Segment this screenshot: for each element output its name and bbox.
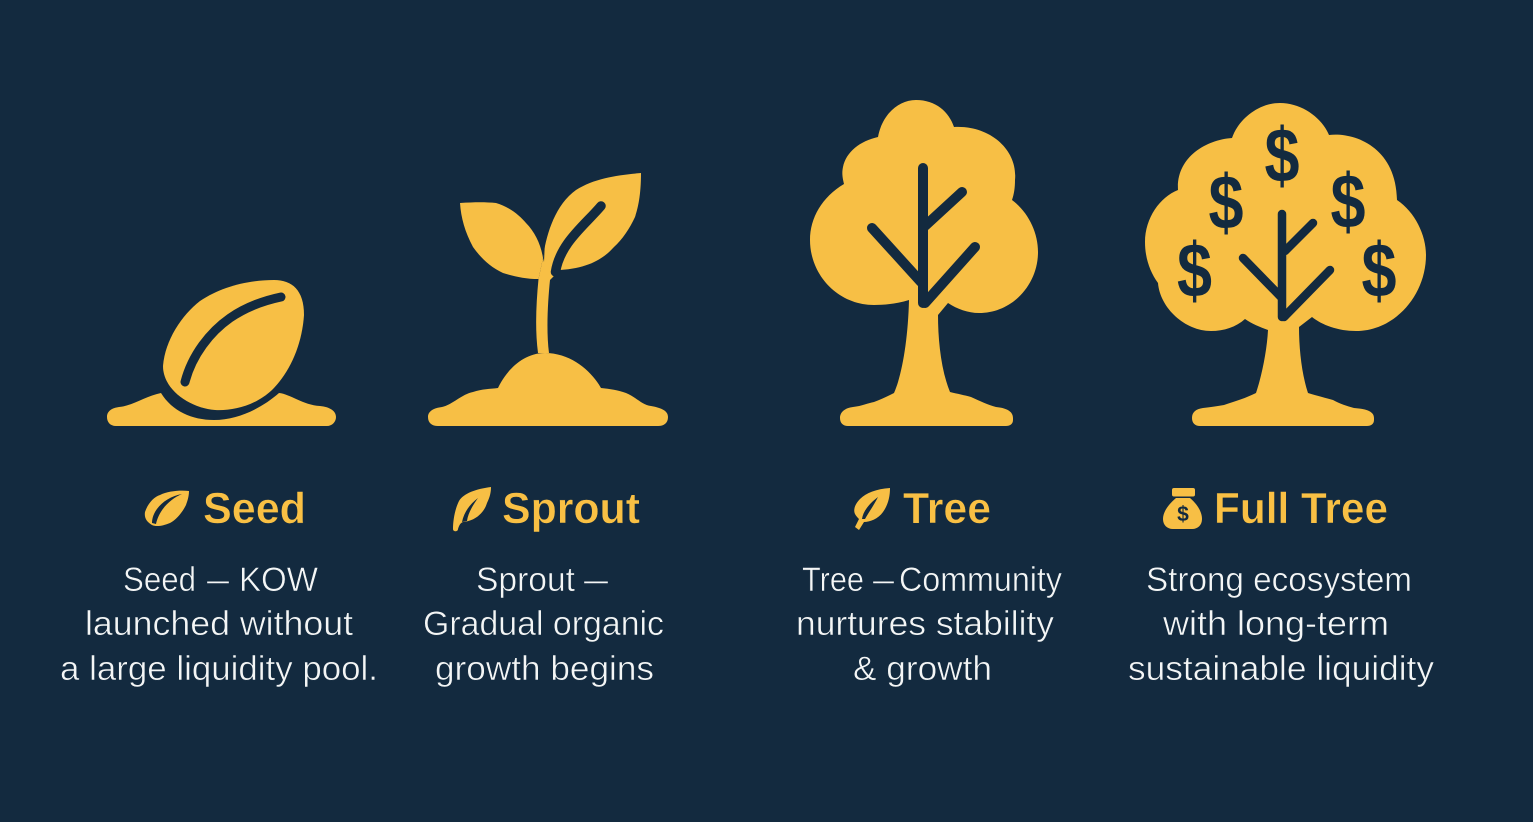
text: Full Tree description: with long-term	[1162, 605, 1389, 643]
text: Sprout description: —	[584, 561, 608, 599]
text: Sprout description	[423, 561, 664, 688]
text: Tree description	[796, 561, 1062, 688]
icon: sprout	[428, 173, 668, 426]
text: Sprout description: Sprout	[476, 561, 576, 599]
text: Sprout description: Gradual organic	[423, 605, 664, 643]
heading: Tree	[854, 484, 991, 533]
text: Tree description: Tree	[802, 561, 864, 599]
text: Tree description: —	[873, 561, 894, 599]
text: Tree description: Community	[899, 561, 1062, 599]
text: Seed description: —	[207, 561, 229, 599]
icon: full tree	[1145, 103, 1426, 426]
text: Seed description: KOW	[239, 561, 318, 599]
text: Full Tree description	[1128, 561, 1434, 688]
icon: full tree: $	[1264, 113, 1300, 199]
text: Tree description: & growth	[853, 650, 992, 688]
heading: Seed	[145, 484, 306, 533]
heading: Sprout: Sprout	[502, 484, 640, 533]
text: Sprout description: growth begins	[435, 650, 654, 688]
icon: tree	[810, 100, 1038, 426]
heading: Full Tree: $	[1177, 503, 1189, 526]
text: Seed description	[60, 561, 378, 688]
icon: full tree: $	[1208, 160, 1244, 246]
heading: Full Tree: Full Tree	[1214, 484, 1388, 533]
text: Full Tree description: Strong ecosystem	[1146, 561, 1412, 599]
icon: full tree: $	[1330, 159, 1366, 245]
icon: full tree: $	[1362, 228, 1396, 314]
text: Tree description: nurtures stability	[796, 605, 1054, 643]
text: Full Tree description: sustainable liquidity	[1128, 650, 1434, 688]
heading: Tree: Tree	[903, 484, 991, 533]
heading: Seed: Seed	[203, 484, 306, 533]
icon: full tree: $	[1177, 228, 1212, 314]
icon: seed	[107, 280, 336, 426]
text: Seed description: a large liquidity pool.	[60, 650, 378, 688]
text: Seed description: launched without	[85, 605, 354, 643]
text: Seed description: Seed	[123, 561, 196, 599]
